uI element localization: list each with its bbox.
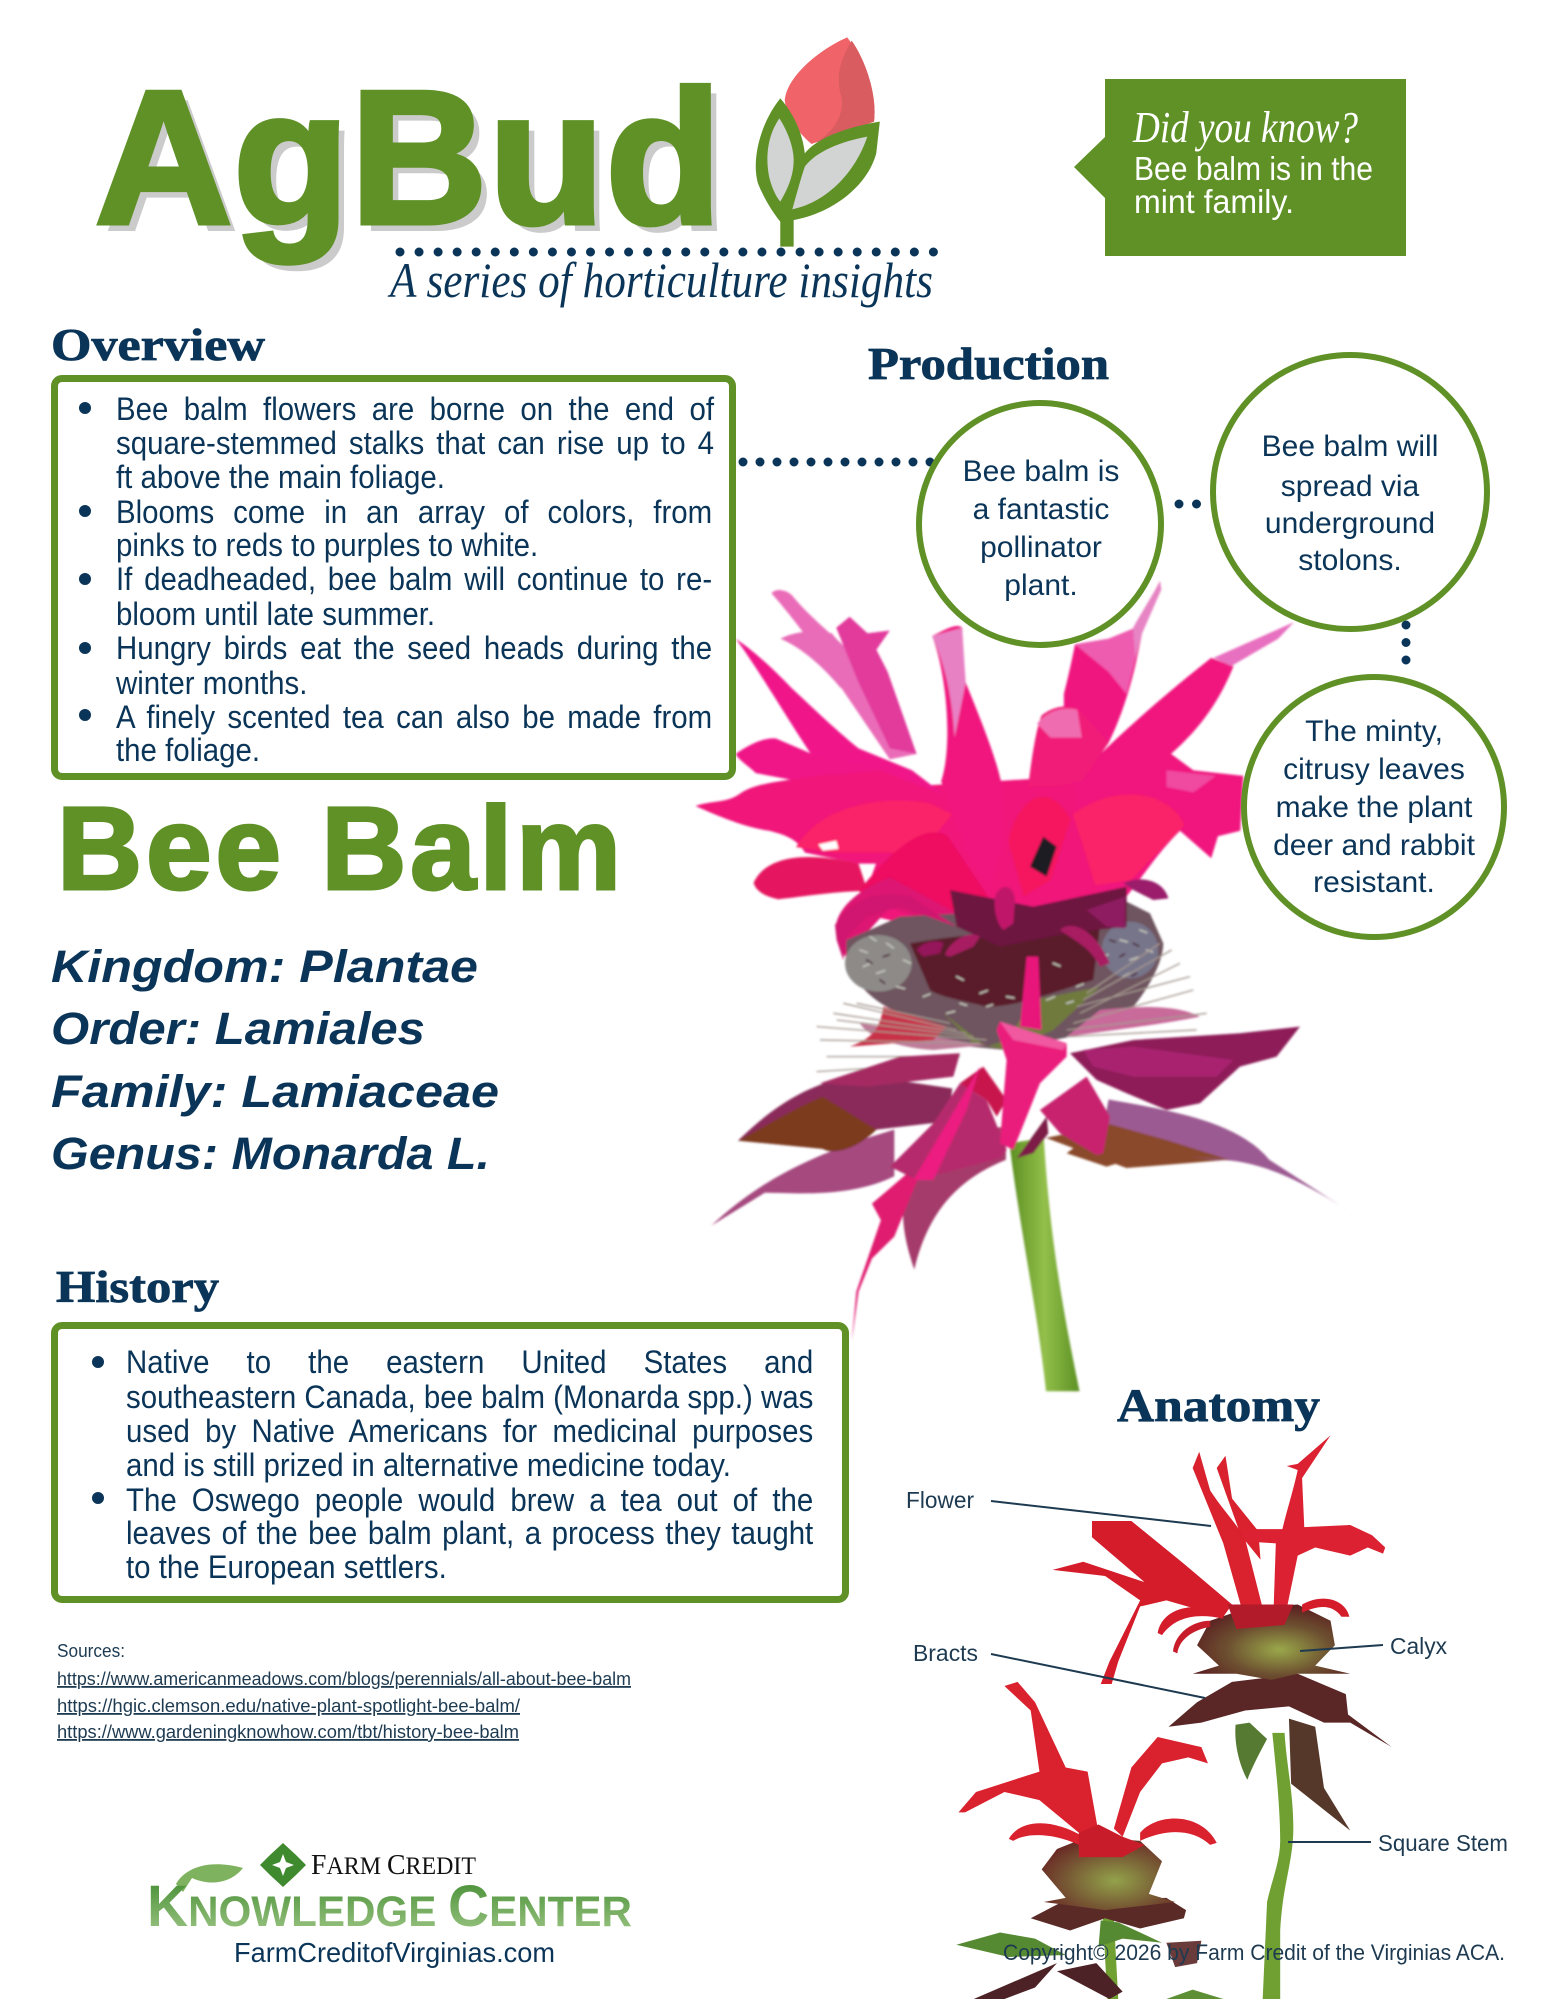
text: website: FarmCreditofVirginias.com — [234, 1937, 555, 1968]
panel: overview: If deadheaded, bee balm will continue to re- — [116, 561, 712, 597]
icon: tulip logo — [756, 37, 880, 247]
panel: overview: Bee balm flowers are borne on the end of — [116, 391, 714, 427]
label: calyx — [1300, 1633, 1447, 1659]
heading: Overview: Overview — [51, 320, 266, 370]
stem — [1009, 1138, 1080, 1391]
circle: pollinator: a fantastic — [973, 493, 1109, 526]
text: farm credit: FARM CREDIT — [311, 1849, 476, 1881]
panel: history: Native to the eastern United States and — [126, 1344, 813, 1380]
taxonomy list: Kingdom: Plantae — [51, 941, 478, 992]
taxonomy list: Genus: Monarda L. — [51, 1128, 490, 1179]
right petals — [1064, 581, 1161, 743]
circle: resistant: The minty, — [1305, 715, 1443, 748]
hair fans — [1067, 1007, 1200, 1037]
circle: resistant: resistant. — [1313, 866, 1435, 899]
taxonomy list: Family: Lamiaceae — [51, 1066, 499, 1117]
calyx body — [846, 900, 1163, 1050]
panel: overview: Blooms come in an array of colors, from — [116, 494, 712, 530]
callout: did you know: Bee balm is in the — [1134, 150, 1373, 187]
callout: did you know — [1074, 79, 1406, 256]
dotted divider: header — [396, 248, 938, 256]
icon: leaf — [176, 1864, 243, 1892]
callout: did you know: Did you know? — [1132, 103, 1358, 152]
icon: diamond — [260, 1843, 306, 1887]
circle: pollinator: plant. — [1004, 569, 1078, 602]
copyright: Copyright© 2026 by Farm Credit of the Virginias ACA. — [1003, 1940, 1505, 1965]
label: bracts — [913, 1640, 1205, 1698]
panel: history: used by Native Americans for medicinal purposes — [126, 1413, 813, 1449]
panel: overview — [51, 375, 736, 780]
panel: overview: pinks to reds to purples to white. — [116, 527, 538, 563]
panel: history: leaves of the bee balm plant, a process they taught — [126, 1515, 813, 1551]
panel: overview: the foliage. — [116, 732, 260, 768]
panel: overview: ft above the main foliage. — [116, 459, 445, 495]
circle: resistant: make the plant — [1276, 791, 1473, 824]
circle: resistant: citrusy leaves — [1283, 753, 1465, 786]
anthers — [945, 935, 980, 957]
circle: stolons — [1213, 355, 1487, 629]
panel: overview: Hungry birds eat the seed heads during the — [116, 630, 712, 666]
subtitle: A series of horticulture insights — [387, 252, 933, 308]
production circles — [916, 352, 1507, 940]
circle: resistant: deer and rabbit — [1273, 829, 1476, 862]
circle: resistant — [1244, 677, 1504, 937]
sources: https://www.gardeningknowhow.com/tbt/history-bee-balm — [57, 1722, 519, 1742]
bracts — [1067, 1123, 1230, 1167]
circle: stolons: underground — [1265, 507, 1435, 540]
sources: https://hgic.clemson.edu/native-plant-spotlight-bee-balm/ — [57, 1696, 520, 1716]
left petals — [859, 776, 1126, 946]
label: square stem: Square Stem — [1378, 1830, 1508, 1856]
panel: history: The Oswego people would brew a tea out of the — [126, 1482, 813, 1518]
label: flower: Flower — [906, 1487, 974, 1513]
heading: Production: Production — [868, 339, 1109, 389]
anatomy photo — [956, 1435, 1392, 1999]
panel: history: and is still prized in alternative medicine today. — [126, 1447, 731, 1483]
panel: overview: winter months. — [116, 665, 307, 701]
panel: history: southeastern Canada, bee balm (Monarda spp.) was — [126, 1379, 813, 1415]
circle: pollinator: Bee balm is — [963, 455, 1119, 488]
dotted connectors: production — [738, 458, 1410, 664]
circle: stolons: stolons. — [1298, 544, 1402, 577]
speckles — [860, 930, 1153, 1013]
taxonomy list — [51, 941, 499, 1179]
title: AgBud: AgBud — [95, 52, 723, 264]
label: calyx: Calyx — [1390, 1633, 1447, 1659]
panel: overview: bloom until late summer. — [116, 596, 435, 632]
taxonomy list: Order: Lamiales — [51, 1003, 425, 1054]
heading: Anatomy: Anatomy — [1117, 1380, 1321, 1432]
label: flower — [906, 1487, 1211, 1526]
callout: did you know: mint family. — [1134, 183, 1294, 220]
circle: stolons: spread via — [1281, 470, 1420, 503]
panel: history: to the European settlers. — [126, 1549, 447, 1585]
bracts — [711, 1130, 894, 1226]
panel: overview: square-stemmed stalks that can rise up to 4 — [116, 425, 714, 461]
circle: pollinator — [919, 403, 1161, 645]
label: bracts: Bracts — [913, 1640, 978, 1666]
panel: history — [51, 1322, 849, 1603]
sources: Sources: — [57, 1641, 125, 1661]
circle: pollinator: pollinator — [980, 531, 1102, 564]
sources: https://www.americanmeadows.com/blogs/perennials/all-about-bee-balm — [57, 1669, 631, 1689]
central floret — [1020, 957, 1042, 1030]
panel: overview: A finely scented tea can also be made from — [116, 699, 712, 735]
circle: stolons: Bee balm will — [1262, 430, 1438, 463]
text: knowledge center: KNOWLEDGE CENTER — [147, 1874, 632, 1939]
heading: History: History — [56, 1262, 220, 1312]
